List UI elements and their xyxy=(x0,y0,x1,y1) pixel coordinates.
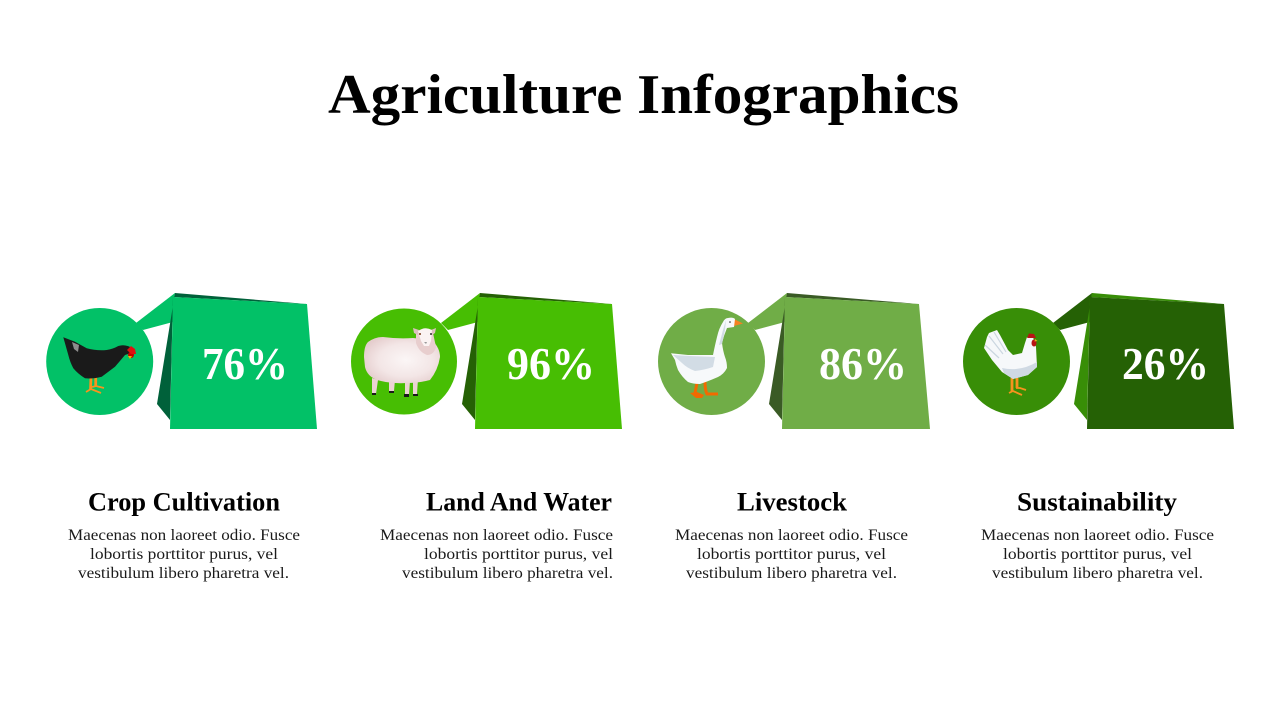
description xyxy=(981,527,1214,582)
callout tail xyxy=(748,293,787,330)
icon: goose xyxy=(671,318,743,398)
percentage card xyxy=(1087,297,1234,429)
icon circle xyxy=(351,308,457,414)
icon circle xyxy=(963,308,1070,415)
icon: white hen xyxy=(984,330,1038,395)
description xyxy=(68,527,300,582)
title: Agriculture Infographics xyxy=(328,64,959,126)
icon: black hen xyxy=(63,337,136,393)
description: Maecenas non laoreet odio. Fusce xyxy=(68,527,300,544)
percentage value: 96% xyxy=(507,338,595,389)
description: Maecenas non laoreet odio. Fusce xyxy=(981,527,1214,544)
folded side xyxy=(157,293,307,420)
description: Maecenas non laoreet odio. Fusce xyxy=(675,527,908,544)
percentage value: 86% xyxy=(819,338,907,389)
panel: land and water xyxy=(351,293,622,582)
description: vestibulum libero pharetra vel. xyxy=(686,565,897,582)
description: lobortis porttitor purus, vel xyxy=(697,546,887,563)
heading: Crop Cultivation xyxy=(88,488,281,516)
percentage card xyxy=(170,297,317,429)
description: vestibulum libero pharetra vel. xyxy=(402,565,613,582)
description xyxy=(675,527,908,582)
callout tail xyxy=(441,293,480,330)
icon circle xyxy=(658,308,765,415)
icon: sheep xyxy=(364,328,440,397)
heading: Sustainability xyxy=(1017,488,1177,516)
callout tail xyxy=(1053,293,1092,330)
panel: livestock xyxy=(658,293,930,582)
heading: Livestock xyxy=(737,488,848,516)
callout tail xyxy=(136,293,175,330)
description: Maecenas non laoreet odio. Fusce xyxy=(380,527,613,544)
folded side xyxy=(769,293,919,420)
heading: Land And Water xyxy=(426,488,612,516)
description: lobortis porttitor purus, vel xyxy=(1003,546,1193,563)
description: vestibulum libero pharetra vel. xyxy=(78,565,289,582)
percentage card xyxy=(475,297,622,429)
description xyxy=(380,527,614,582)
panel: sustainability xyxy=(963,293,1234,582)
folded side xyxy=(462,293,612,420)
percentage value: 26% xyxy=(1122,338,1209,389)
description: vestibulum libero pharetra vel. xyxy=(992,565,1203,582)
icon circle xyxy=(46,308,153,415)
percentage card xyxy=(782,297,930,429)
description: lobortis porttitor purus, vel xyxy=(90,546,279,563)
panel: crop cultivation xyxy=(46,293,317,582)
percentage value: 76% xyxy=(202,338,288,389)
folded side xyxy=(1074,293,1224,420)
description: lobortis porttitor purus, vel xyxy=(424,546,614,563)
